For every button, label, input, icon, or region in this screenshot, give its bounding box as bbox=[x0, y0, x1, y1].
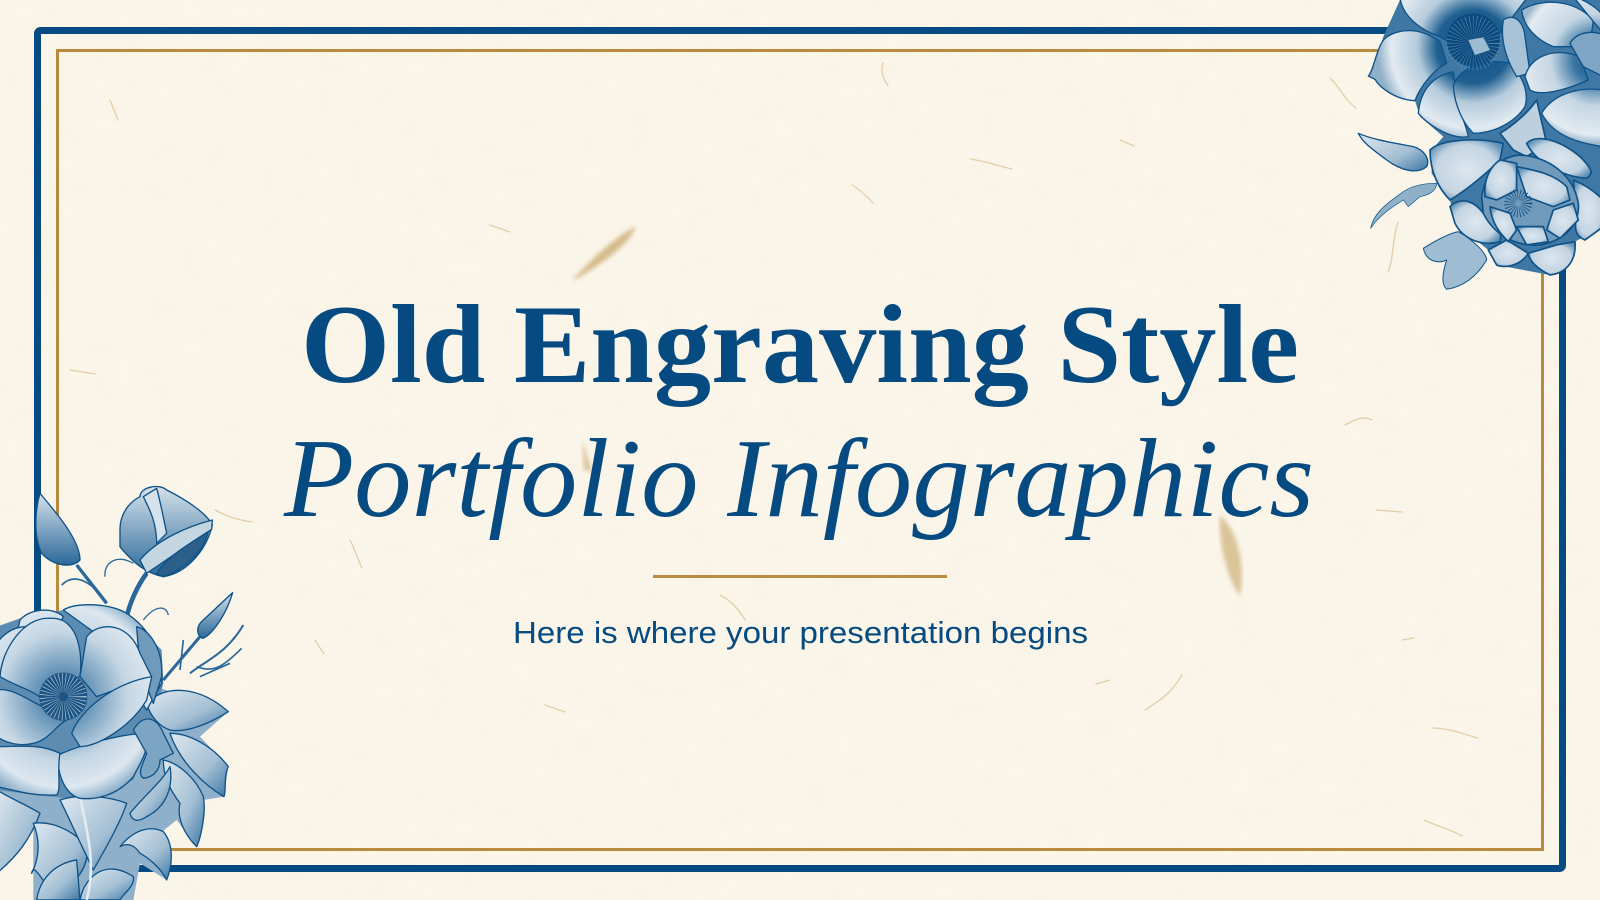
flowers: bottom left cluster bbox=[0, 487, 243, 900]
title line 1: Old Engraving Style bbox=[301, 283, 1299, 407]
foliage backing bbox=[0, 683, 228, 900]
flowers: top right cluster bbox=[1358, 0, 1600, 289]
flower: upper left bloom bbox=[1368, 0, 1530, 137]
bud: lower drooping flower bbox=[1423, 232, 1487, 289]
flower: right bloom bbox=[1522, 0, 1600, 147]
flower backing bbox=[0, 610, 163, 800]
title line 2: Portfolio Infographics bbox=[283, 417, 1314, 541]
sprig: small leaf spray bbox=[1371, 183, 1437, 228]
bud: rosebud bbox=[120, 487, 212, 577]
cluster backing bbox=[1372, 0, 1600, 275]
flower: open bloom bbox=[0, 605, 173, 799]
divider bbox=[653, 575, 947, 578]
stems and sprigs bbox=[62, 559, 243, 680]
title bbox=[283, 283, 1314, 541]
bud: small upper right bud bbox=[198, 593, 233, 638]
bud: pointed left bud bbox=[36, 493, 80, 565]
subtitle: Here is where your presentation begins bbox=[513, 615, 1088, 650]
bud: left pointed bud bbox=[1358, 133, 1428, 171]
leaves: right foliage bbox=[0, 690, 228, 900]
flower: rose bbox=[1430, 100, 1600, 275]
